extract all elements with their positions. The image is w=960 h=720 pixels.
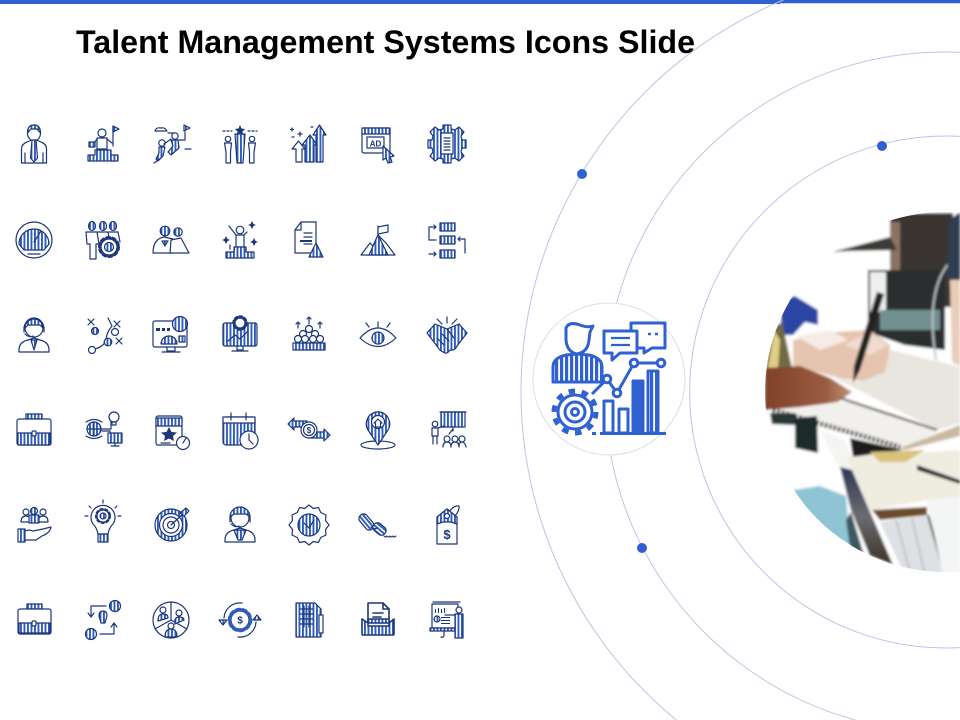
icon: document in tray [362,603,394,635]
icon: dollar gear cycle [219,603,261,637]
icon: globe bulb and monitor [86,412,122,446]
icon: mountain with flag [361,225,395,255]
icon: person [553,324,602,382]
icon: trend line [592,359,665,397]
icon: briefcase [17,414,51,445]
icon: badge [289,505,329,545]
icon: people pyramid with arrows [293,317,325,350]
icon: presenter at whiteboard [430,602,463,638]
icon: spreadsheet with pen [296,603,323,637]
icon: growth arrows [290,125,326,162]
icon: map pin with home [361,412,395,449]
icon: gear with document [428,125,466,163]
icon: calendar with star and clock [156,416,190,450]
icon: lightbulb with gear [85,500,121,542]
icon: man on podium with flag [88,126,119,161]
title: Talent Management Systems Icons Slide [76,24,695,60]
icon: leader with team [223,125,257,163]
icon: process flowchart [429,223,465,258]
icon: ad window with cursor: AD [370,140,381,148]
icon: monitor with gear [223,316,257,351]
icon: team with gear [86,222,120,259]
icon: briefcase [18,604,51,634]
icon: bar chart [592,371,666,434]
icon: target with arrow [155,508,189,541]
icon: gear [554,391,596,433]
icon: eye [360,322,396,346]
icon: playbook tactics [88,318,122,354]
top accent bar [0,0,780,4]
icon: dollar gear cycle: $ [237,616,243,626]
icon: price tag [437,506,459,544]
icon: handshake [427,317,467,353]
concentric rings with dots [521,0,960,720]
icon: speech bubbles [604,323,665,360]
icon: price tag: $ [443,527,451,542]
icon: hand holding team [18,508,51,542]
icon: climbers helping [154,125,191,163]
icon: businessman [22,125,46,163]
icon: striped gauge [16,222,52,258]
icon: exchange arrows with dollar: $ [307,426,312,435]
icon: document with warning [295,222,323,257]
central circle badge with talent icon [533,303,685,455]
icon: monitor with gauge [153,316,188,352]
icon: winner on podium [222,221,258,258]
icon: ad window with cursor [362,128,394,163]
icon: telephone [357,512,396,537]
icon: two people partnering [153,226,189,253]
icon: exchange arrows with dollar [288,418,330,441]
icon: calendar with clock [223,413,258,449]
icon: three people in circle [153,602,189,638]
icon: support agent with headset [225,507,255,542]
photo: hands writing in a notebook [765,212,960,575]
icon: global idea exchange [86,600,120,640]
icon: support agent with headset [19,318,49,352]
top accent bar right segment [780,0,960,4]
icon: presenter with audience [432,412,466,447]
